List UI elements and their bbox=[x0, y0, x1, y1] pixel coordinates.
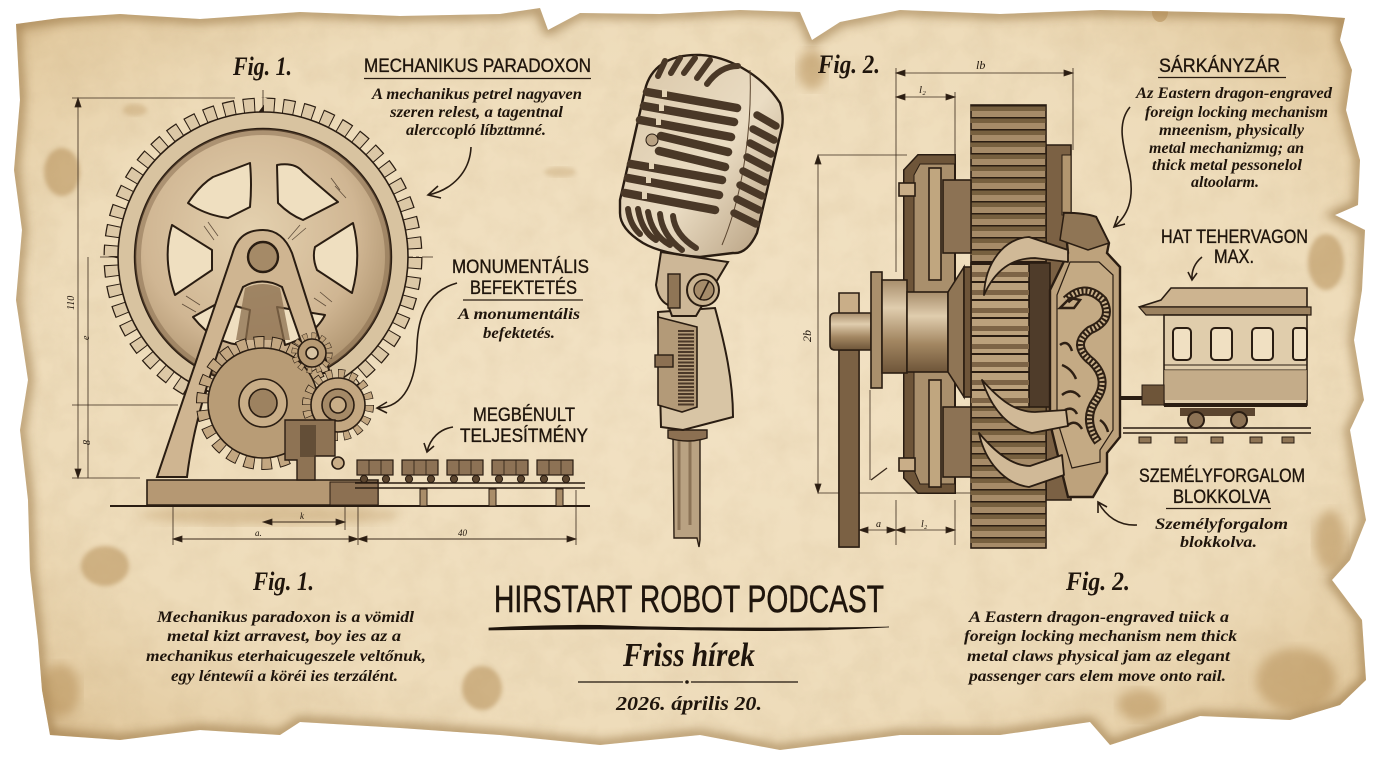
chart: Fig. 1 gear machine diagram bbox=[66, 90, 590, 545]
callout: Hat tehervagon max bbox=[1161, 227, 1308, 268]
callout: Hat tehervagon max: HAT TEHERVAGON bbox=[1161, 227, 1308, 248]
arrow: to small gears bbox=[377, 283, 457, 413]
dragon claws bbox=[979, 237, 1068, 487]
arrow: to dragon plate bbox=[1114, 107, 1131, 227]
callout: Megbénult teljesítmény: MEGBÉNULT bbox=[473, 405, 575, 426]
a-frame support bbox=[157, 230, 330, 477]
chart: Fig. 1 gear machine diagram: e bbox=[81, 335, 92, 340]
callout: Sárkányzár: thick metal pessonelol bbox=[1152, 157, 1303, 174]
chart: Fig. 1 gear machine diagram: k bbox=[300, 511, 305, 521]
caption: Fig. 2: foreign locking mechanism nem thick bbox=[964, 628, 1237, 645]
caption: Fig. 2: Fig. 2. bbox=[1065, 567, 1130, 596]
callout: Személyforgalom blokkolva bbox=[1139, 466, 1305, 551]
callout: Sárkányzár bbox=[1135, 56, 1333, 191]
base plinth bbox=[147, 480, 378, 505]
callout: Sárkányzár: altoolarm. bbox=[1191, 174, 1259, 191]
caption: Fig. 2: passenger cars elem move onto rail. bbox=[967, 668, 1226, 685]
caption: Fig. 1: mechanikus eterhaicugeszele veltőnuk, bbox=[146, 648, 426, 665]
callout: Sárkányzár: metal mechanizmıg; an bbox=[1149, 140, 1304, 157]
callout: Személyforgalom blokkolva: Személyforgalom bbox=[1155, 516, 1288, 533]
arrow: to plate bottom bbox=[1098, 502, 1137, 525]
mic yoke bbox=[656, 252, 728, 316]
callout: Személyforgalom blokkolva: BLOKKOLVA bbox=[1173, 487, 1270, 508]
chart: Fig. 1 gear machine diagram: 40 bbox=[458, 528, 468, 538]
callout: Mechanikus paradoxon: MECHANIKUS PARADOXON bbox=[364, 56, 591, 77]
caption: Fig. 1 bbox=[146, 567, 426, 685]
dimension lines: Fig. 1 bbox=[72, 90, 576, 545]
chart: Fig. 2 dragon lock mechanism: lb bbox=[976, 58, 985, 72]
caption: Fig. 1: Mechanikus paradoxon is a vömidl bbox=[156, 609, 415, 626]
dimension lines: Fig. 2 bbox=[815, 68, 1073, 545]
big gear bbox=[112, 106, 414, 408]
dragon plate bbox=[1050, 213, 1120, 497]
callout: Megbénult teljesítmény bbox=[460, 405, 588, 447]
arrow: to carriage bbox=[1188, 257, 1202, 280]
housing bbox=[899, 155, 971, 493]
callout: Monumentális befektetés: befektetés. bbox=[483, 325, 555, 342]
mic body bbox=[658, 308, 733, 430]
arrow: to big gear bbox=[428, 147, 471, 198]
callout: Megbénult teljesítmény: TELJESÍTMÉNY bbox=[460, 426, 588, 447]
grille slots bbox=[625, 58, 776, 250]
callout: Személyforgalom blokkolva: blokkolva. bbox=[1180, 534, 1257, 551]
chart: Fig. 2 dragon lock mechanism: 2b bbox=[800, 330, 814, 342]
callout: Hat tehervagon max: MAX. bbox=[1214, 247, 1254, 268]
rail and wagons bbox=[355, 460, 585, 506]
callout: Monumentális befektetés: A monumentális bbox=[457, 306, 580, 323]
callout: Monumentális befektetés: BEFEKTETÉS bbox=[470, 278, 577, 299]
chart: Fig. 1 gear machine diagram: a. bbox=[255, 528, 262, 538]
chart: Fig. 1 gear machine diagram: 110 bbox=[66, 296, 77, 310]
chart: Fig. 1 gear machine diagram: 8 bbox=[82, 440, 93, 445]
callout: Sárkányzár: foreign locking mechanism bbox=[1145, 104, 1328, 121]
callout: Monumentális befektetés: MONUMENTÁLIS bbox=[452, 257, 589, 278]
shaft hub bbox=[830, 263, 1050, 407]
callout: Sárkányzár: Az Eastern dragon-engraved bbox=[1135, 85, 1333, 102]
caption: Fig. 1: Fig. 1. bbox=[252, 567, 314, 596]
caption: Fig. 2 bbox=[964, 567, 1237, 685]
caption: Fig. 1: metal kizt arravest, boy ies az a bbox=[167, 628, 401, 645]
title block bbox=[489, 579, 889, 715]
mic stand pole bbox=[673, 438, 700, 547]
callout: Mechanikus paradoxon: A mechanikus petrel nagyaven bbox=[371, 86, 582, 103]
chart: Fig. 2 dragon lock mechanism bbox=[800, 58, 1311, 548]
callout: Monumentális befektetés bbox=[452, 257, 589, 342]
chart: Fig. 2 dragon lock mechanism: l₂ bbox=[921, 519, 928, 530]
caption: Fig. 2: A Eastern dragon-engraved tıiick a bbox=[968, 609, 1229, 626]
callout: Mechanikus paradoxon: szeren relest, a tagentnal bbox=[389, 104, 564, 121]
heading: Fig. 2 top: Fig. 2. bbox=[817, 50, 880, 79]
gear windows bbox=[168, 163, 357, 345]
callout: Személyforgalom blokkolva: SZEMÉLYFORGALOM bbox=[1139, 466, 1305, 487]
chart: Fig. 2 dragon lock mechanism: a bbox=[876, 519, 881, 530]
mic head bbox=[620, 55, 783, 257]
callout: Mechanikus paradoxon bbox=[364, 56, 591, 139]
caption: Fig. 2: metal claws physical jam az elegant bbox=[967, 648, 1231, 665]
heading: Fig. 1 top: Fig. 1. bbox=[232, 52, 292, 81]
callout: Mechanikus paradoxon: alerccopló líbzttmné. bbox=[406, 122, 546, 139]
small gears bbox=[203, 336, 369, 480]
caption: Fig. 1: egy léntewíi a köréi ies terzálént. bbox=[171, 668, 398, 685]
train carriage bbox=[1120, 288, 1311, 443]
arrow: to wagons bbox=[424, 427, 453, 452]
callout: Sárkányzár: SÁRKÁNYZÁR bbox=[1159, 56, 1280, 77]
illustration: vintage microphone bbox=[620, 55, 783, 547]
chart: Fig. 2 dragon lock mechanism: l₂ bbox=[919, 84, 926, 96]
callout: Sárkányzár: mneenism, physically bbox=[1159, 122, 1305, 139]
main spur gear bbox=[971, 105, 1071, 548]
title block: HIRSTART ROBOT PODCAST bbox=[494, 579, 884, 621]
title block: 2026. április 20. bbox=[615, 693, 762, 715]
title block: Friss hírek bbox=[622, 637, 755, 674]
dragon engraving bbox=[1066, 291, 1106, 442]
shaft support bar bbox=[839, 293, 859, 547]
